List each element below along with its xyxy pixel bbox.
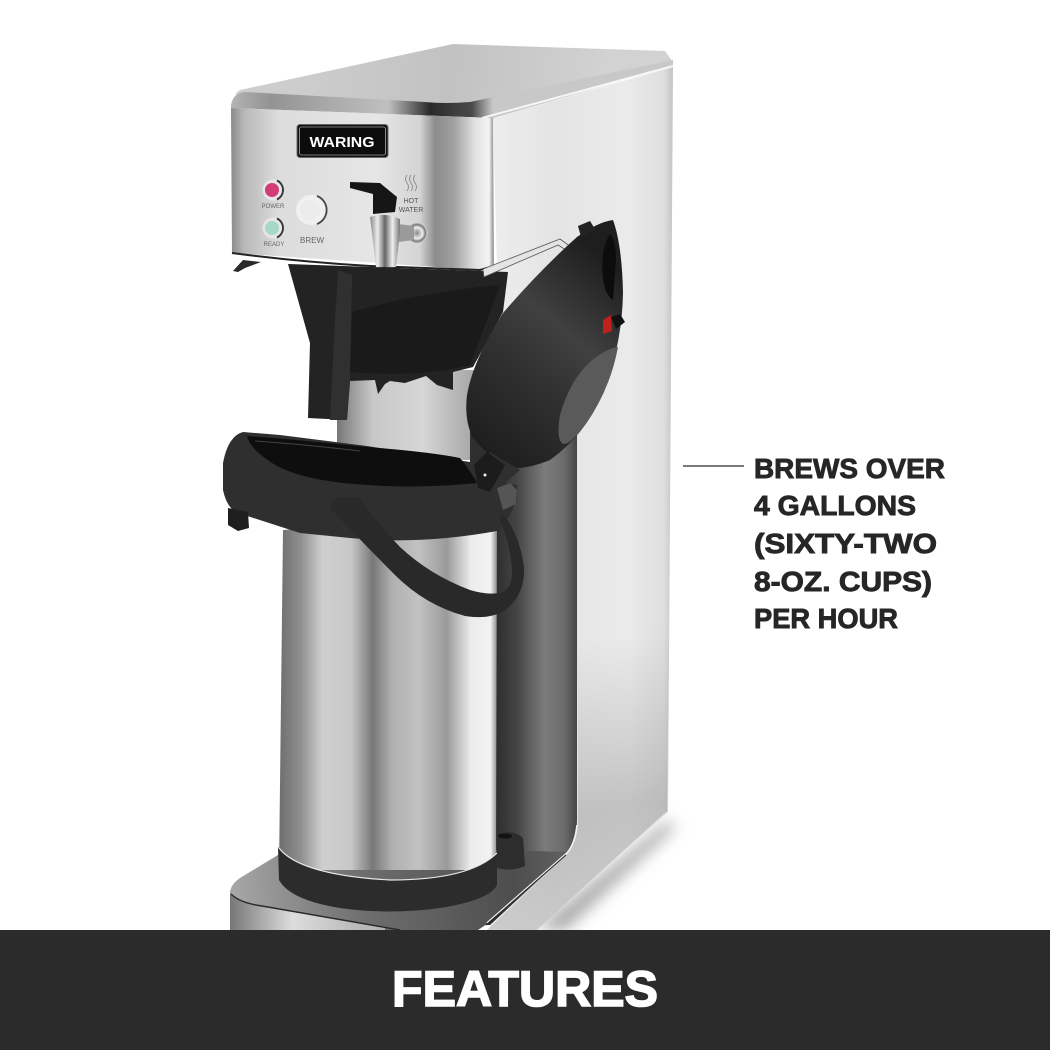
airpot handle (330, 497, 524, 617)
cabinet bottom edge (232, 253, 494, 270)
cabinet front panel (231, 108, 494, 270)
pot bottom highlight (279, 848, 497, 880)
footer heading: FEATURES (392, 961, 658, 1017)
top right edge highlight (482, 66, 673, 118)
airpot bottom band (278, 847, 497, 912)
power button (262, 180, 285, 210)
power button: POWER (262, 204, 285, 210)
brew button: BREW (300, 236, 324, 245)
open lid (466, 220, 625, 468)
footer band (0, 930, 1050, 1050)
hot water faucet (350, 182, 428, 267)
callout text: (SIXTY-TWO (754, 528, 937, 559)
callout text: 4 GALLONS (754, 490, 916, 521)
lower shelf strip (463, 239, 571, 289)
cabinet top trim (231, 60, 673, 118)
rubber locator foot (497, 832, 525, 870)
product photo: coffee brewer (223, 44, 676, 930)
column behind the brew basket (337, 370, 487, 460)
hot water label with steam icon (399, 175, 423, 214)
ready button (262, 218, 284, 248)
callout text (754, 453, 945, 634)
callout leader line (683, 465, 744, 467)
airpot lid ring (223, 432, 520, 540)
brew basket funnel (288, 264, 508, 420)
brew button (296, 195, 327, 245)
callout text: BREWS OVER (754, 453, 945, 484)
tower recess (470, 430, 577, 925)
ready button: READY (264, 242, 284, 248)
logo badge: Waring: WARING (310, 134, 374, 151)
hot water label with steam icon: HOT (404, 198, 419, 205)
logo badge: Waring (297, 124, 388, 158)
base plate (230, 825, 577, 930)
callout text: PER HOUR (754, 603, 898, 634)
tower side panel (487, 67, 673, 930)
cabinet top plate (236, 44, 673, 106)
small bracket left (233, 260, 261, 272)
brewer base shadow (535, 822, 676, 930)
hot water label with steam icon: WATER (399, 207, 423, 214)
airpot body (279, 515, 497, 870)
callout text: 8-OZ. CUPS) (754, 566, 932, 597)
